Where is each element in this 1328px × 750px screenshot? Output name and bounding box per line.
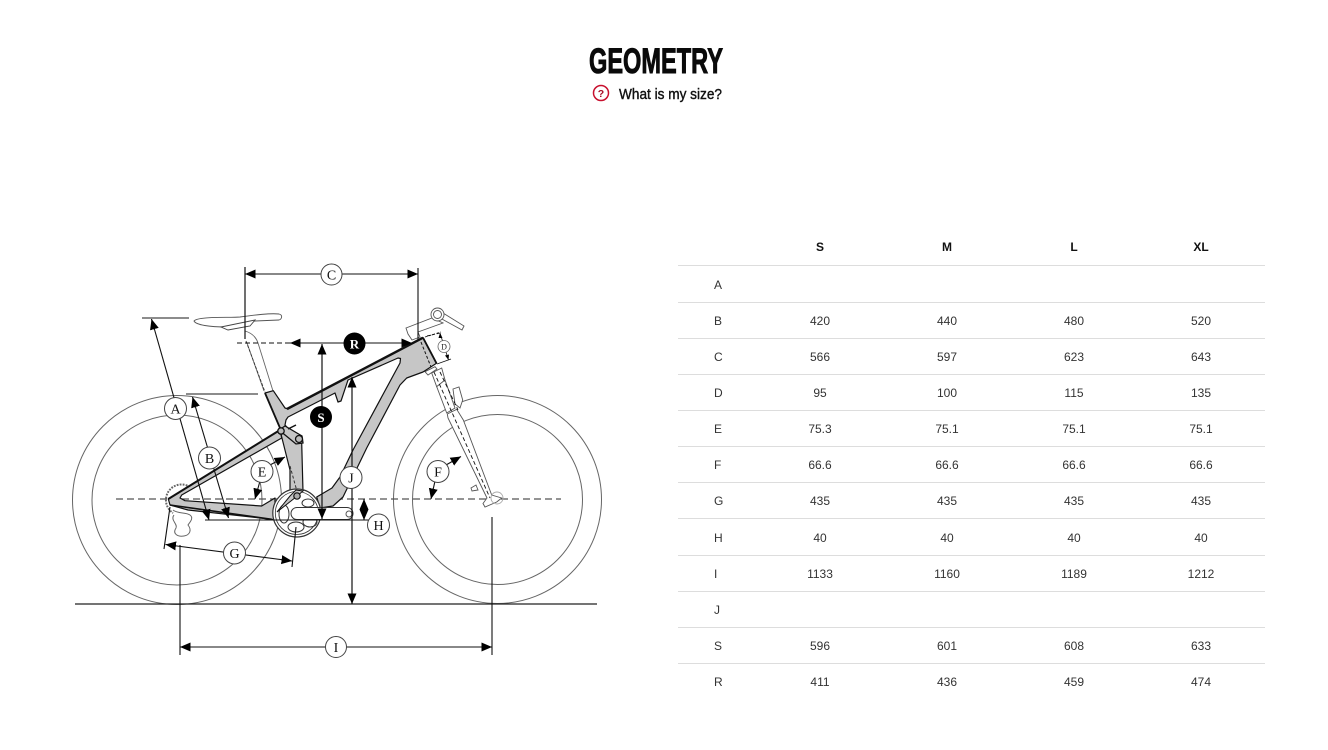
geometry table xyxy=(678,240,1265,689)
dimension E xyxy=(251,457,285,499)
dimension F xyxy=(427,456,461,499)
row D: D xyxy=(714,386,723,400)
row H: 40 xyxy=(1194,531,1208,545)
seatpost xyxy=(245,331,273,392)
row B: 440 xyxy=(937,314,957,328)
row S: 633 xyxy=(1191,639,1211,653)
row I xyxy=(678,555,1265,592)
row H: 40 xyxy=(813,531,827,545)
dimension E: E xyxy=(258,466,266,480)
row F: F xyxy=(714,458,721,472)
icon: question mark xyxy=(594,86,608,100)
row G: 435 xyxy=(1064,494,1084,508)
row F: 66.6 xyxy=(808,458,832,472)
row E: 75.1 xyxy=(935,422,959,436)
row F: 66.6 xyxy=(935,458,959,472)
row G: 435 xyxy=(937,494,957,508)
axle line xyxy=(116,498,561,500)
table header: XL xyxy=(1193,240,1209,254)
rear wheel xyxy=(72,396,282,604)
dimension F: F xyxy=(434,466,442,480)
row C: 643 xyxy=(1191,350,1211,364)
dimension I xyxy=(180,517,492,658)
rear cassette and derailleur xyxy=(166,484,192,536)
row A: A xyxy=(714,278,722,292)
row B: B xyxy=(714,314,722,328)
icon: question mark: ? xyxy=(598,88,604,100)
row R: R xyxy=(714,675,723,689)
row S xyxy=(678,627,1265,664)
dimension C xyxy=(245,264,418,340)
frame: front triangle xyxy=(265,338,436,508)
row E xyxy=(678,410,1265,447)
row R xyxy=(678,663,1265,700)
dimension A xyxy=(142,318,209,520)
dimension B: B xyxy=(205,452,214,467)
table header xyxy=(816,240,1209,254)
row I: 1189 xyxy=(1061,567,1087,581)
row J: J xyxy=(714,603,720,617)
dimension S: S xyxy=(317,410,325,425)
row D: 100 xyxy=(937,386,957,400)
row D: 95 xyxy=(813,386,827,400)
row R: 436 xyxy=(937,675,957,689)
suspension link xyxy=(278,425,303,444)
row S: 596 xyxy=(810,639,830,653)
row S: 608 xyxy=(1064,639,1084,653)
row G: 435 xyxy=(810,494,830,508)
row E: 75.1 xyxy=(1189,422,1213,436)
row R: 411 xyxy=(810,675,830,689)
row C xyxy=(678,338,1265,375)
dimension G xyxy=(164,507,296,567)
row E: 75.3 xyxy=(808,422,832,436)
dimension B xyxy=(186,394,258,518)
row R: 474 xyxy=(1191,675,1211,689)
row D: 135 xyxy=(1191,386,1211,400)
row C: 623 xyxy=(1064,350,1084,364)
row H xyxy=(678,518,1265,555)
row H: H xyxy=(714,531,723,545)
row B: 520 xyxy=(1191,314,1211,328)
dimension I: I xyxy=(334,641,339,656)
row F: 66.6 xyxy=(1062,458,1086,472)
row S: 601 xyxy=(937,639,957,653)
dimension A: A xyxy=(170,402,181,418)
row H: 40 xyxy=(940,531,954,545)
row F xyxy=(678,446,1265,483)
fork xyxy=(425,367,503,507)
row A xyxy=(678,265,1265,303)
dimension J: J xyxy=(348,472,354,486)
row I: 1133 xyxy=(807,567,833,581)
row I: 1160 xyxy=(934,567,960,581)
frame: rear triangle xyxy=(168,430,282,520)
saddle xyxy=(194,314,282,330)
dimension C: C xyxy=(327,268,336,284)
dimension H xyxy=(205,499,390,536)
ground line xyxy=(75,603,597,605)
row G xyxy=(678,482,1265,519)
dimension R: R xyxy=(350,336,360,352)
row J xyxy=(678,591,1265,628)
row C: C xyxy=(714,350,723,364)
row C: 597 xyxy=(937,350,957,364)
row H: 40 xyxy=(1067,531,1081,545)
dimension H: H xyxy=(373,519,384,534)
dimension G: G xyxy=(229,547,240,562)
table header: M xyxy=(942,240,952,254)
table header: S xyxy=(816,240,824,254)
table header: L xyxy=(1070,240,1078,254)
row I: I xyxy=(714,567,717,581)
row B xyxy=(678,302,1265,339)
title: GEOMETRY xyxy=(589,42,723,81)
size link: What is my size? xyxy=(619,86,722,103)
row E: E xyxy=(714,422,722,436)
row E: 75.1 xyxy=(1062,422,1086,436)
dimension R xyxy=(237,332,412,354)
row S: S xyxy=(714,639,722,653)
row G: 435 xyxy=(1191,494,1211,508)
dimension D: D xyxy=(441,342,447,352)
dimension J xyxy=(340,377,362,604)
row C: 566 xyxy=(810,350,830,364)
chainring and crank xyxy=(273,489,353,537)
row D: 115 xyxy=(1064,386,1084,400)
dimension D xyxy=(425,332,451,364)
front wheel xyxy=(394,396,602,604)
row B: 420 xyxy=(810,314,830,328)
row G: G xyxy=(714,494,723,508)
handlebar and stem xyxy=(406,308,464,340)
dimension S xyxy=(310,344,332,519)
row I: 1212 xyxy=(1188,567,1214,581)
row F: 66.6 xyxy=(1189,458,1213,472)
row B: 480 xyxy=(1064,314,1084,328)
row R: 459 xyxy=(1064,675,1084,689)
row D xyxy=(678,374,1265,411)
